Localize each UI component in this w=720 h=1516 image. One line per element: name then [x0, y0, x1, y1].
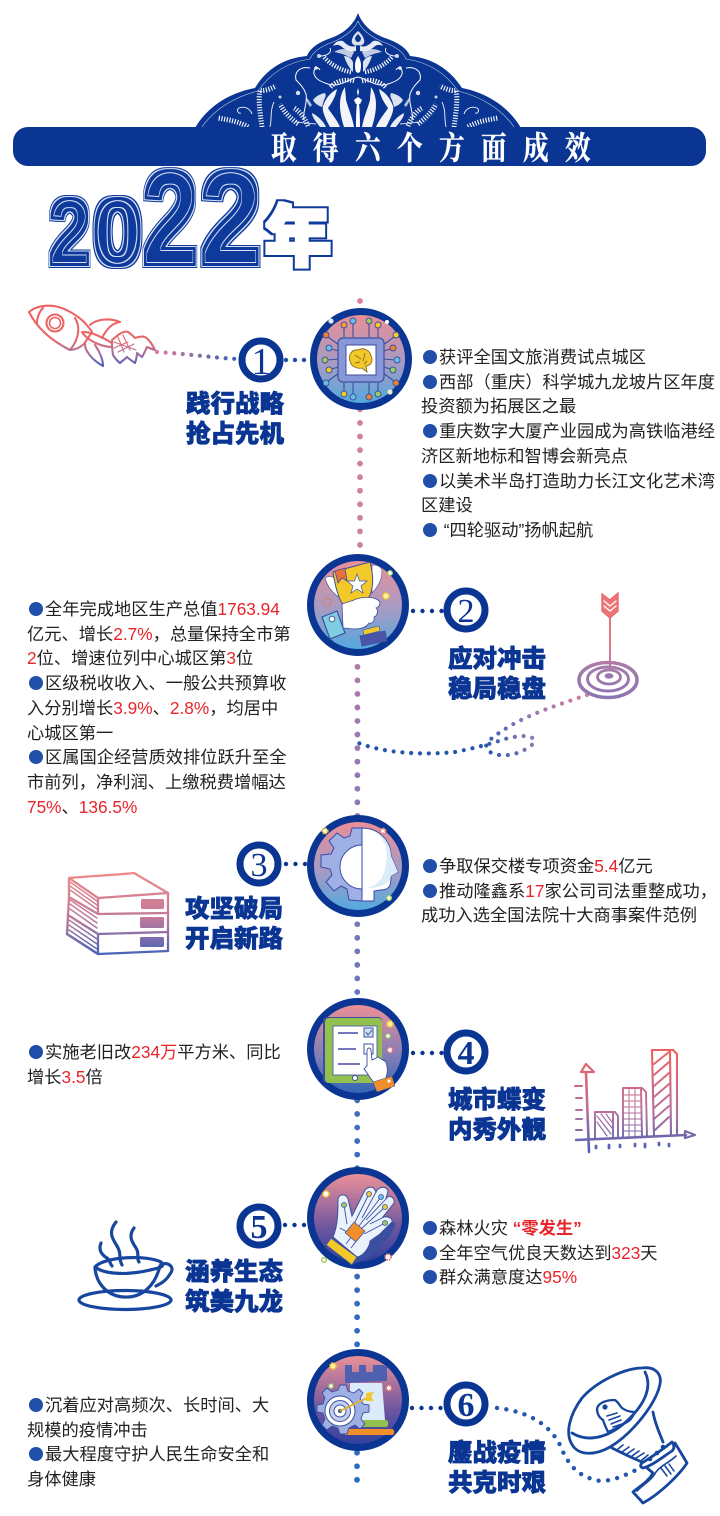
heading 1: 践行战略 — [186, 391, 284, 418]
heading 4: 内秀外靓 — [448, 1117, 546, 1144]
text block 2 — [27, 599, 291, 817]
title banner — [13, 127, 706, 166]
number badge 2: 2 — [458, 593, 474, 630]
text block 2: 心城区第一 — [27, 723, 113, 743]
icon: bar chart — [575, 1050, 695, 1152]
text block 6: 最大程度守护人民生命安全和 — [45, 1444, 269, 1464]
text block 6: 规模的疫情冲击 — [27, 1420, 148, 1440]
text block 6 — [27, 1395, 269, 1489]
text block 4: 增长3.5倍 — [27, 1067, 103, 1087]
circle icon 3: gear and head — [310, 818, 406, 914]
heading 6 — [448, 1439, 546, 1497]
text block 2: 区级税收收入、一般公共预算收 — [45, 673, 287, 693]
heading 4 — [448, 1086, 546, 1144]
heading 1: 抢占先机 — [186, 421, 284, 448]
text block 6: 沉着应对高频次、长时间、大 — [45, 1395, 269, 1415]
number badge 2 — [447, 591, 485, 630]
heading 3: 攻坚破局 — [185, 896, 283, 923]
text block 1: 获评全国文旅消费试点城区 — [439, 347, 646, 367]
year 2022: 0 — [93, 181, 142, 285]
heading 5: 筑美九龙 — [185, 1289, 283, 1316]
text block 1: “四轮驱动”扬帆起航 — [444, 520, 593, 540]
title text: 取得六个方面成效 — [271, 130, 607, 166]
icon: target with arrow — [579, 593, 637, 698]
year 2022 — [49, 143, 331, 293]
timeline dotted line — [357, 301, 360, 1481]
circle icon 1: chip — [314, 312, 408, 406]
text block 5 — [423, 1218, 658, 1287]
text block 1 — [421, 347, 715, 540]
heading 5: 涵养生态 — [185, 1259, 283, 1286]
text block 5: 森林火灾 “零发生” — [439, 1218, 582, 1238]
number badge 1: 1 — [252, 341, 270, 383]
text block 2: 75%、136.5% — [27, 797, 137, 817]
text block 2: 亿元、增长2.7%，总量保持全市第 — [27, 624, 291, 644]
ornamental dome — [195, 13, 521, 128]
number badge 6: 6 — [458, 1387, 474, 1424]
text block 1: 投资额为拓展区之最 — [421, 396, 576, 416]
year 2022: 2 — [49, 180, 90, 284]
text block 3: 成功入选全国法院十大商事案件范例 — [421, 905, 697, 925]
number badge 4 — [447, 1033, 485, 1072]
text block 1: 以美术半岛打造助力长江文化艺术湾 — [439, 471, 715, 491]
text block 1: 济区新地标和智博会新亮点 — [421, 446, 628, 466]
heading 2: 应对冲击 — [448, 646, 546, 673]
icon: tea cup — [79, 1222, 172, 1310]
text block 2: 市前列，净利润、上缴税费增幅达 — [27, 772, 286, 792]
text block 6: 身体健康 — [27, 1469, 96, 1489]
circle icon 4: tablet — [310, 1002, 406, 1096]
number badge 5 — [240, 1207, 278, 1246]
number badge 3 — [240, 845, 278, 884]
text block 1: 重庆数字大厦产业园成为高铁临港经 — [439, 421, 715, 441]
heading 4: 城市蝶变 — [448, 1087, 546, 1114]
text block 4: 实施老旧改234万平方米、同比 — [45, 1042, 281, 1062]
year 2022: 年 — [265, 200, 331, 274]
heading 3: 开启新路 — [185, 926, 283, 953]
heading 6: 鏖战疫情 — [448, 1440, 546, 1467]
connector: badge 6 to megaphone — [497, 1408, 636, 1481]
text block 3 — [421, 856, 717, 925]
connector: badge 1 to circle 1 — [286, 358, 308, 362]
text block 5: 群众满意度达95% — [439, 1267, 577, 1287]
icon: rocket — [29, 306, 155, 366]
number badge 3: 3 — [250, 847, 268, 884]
text block 2: 全年完成地区生产总值1763.94 — [45, 599, 280, 619]
text block 5: 全年空气优良天数达到323天 — [439, 1243, 658, 1263]
circle icon 2: trophy — [310, 558, 406, 652]
number badge 1 — [242, 341, 280, 383]
text block 3: 推动隆鑫系17家公司司法重整成功， — [439, 881, 717, 901]
connector: circle 2 to badge 2 — [413, 609, 442, 613]
number badge 4: 4 — [458, 1035, 474, 1072]
connector: looping line from target — [356, 695, 587, 755]
number badge 5: 5 — [250, 1209, 268, 1246]
circle icon 5: smart glove — [310, 1170, 406, 1266]
year 2022: 2 — [200, 143, 261, 292]
text block 1: 区建设 — [421, 495, 473, 515]
icon: megaphone — [569, 1368, 687, 1503]
text block 2: 区属国企经营质效排位跃升至全 — [45, 747, 287, 767]
text block 1: 西部（重庆）科学城九龙坡片区年度 — [439, 372, 715, 392]
text block 3: 争取保交楼专项资金5.4亿元 — [439, 856, 653, 876]
year 2022: 2 — [142, 145, 198, 293]
text block 2: 入分别增长3.9%、2.8%，均居中 — [27, 698, 278, 718]
heading 6: 共克时艰 — [448, 1470, 546, 1497]
connector: badge 5 to circle 5 — [285, 1223, 305, 1227]
heading 1 — [186, 390, 284, 448]
text block 2: 2位、增速位列中心城区第3位 — [27, 648, 253, 668]
heading 2: 稳局稳盘 — [448, 676, 546, 703]
heading 3 — [185, 895, 284, 953]
icon: stack of books — [67, 873, 168, 954]
connector: circle 4 to badge 4 — [413, 1051, 442, 1055]
number badge 6 — [447, 1385, 485, 1424]
connector: circle 6 to badge 6 — [412, 1406, 442, 1410]
connector: badge 3 to circle 3 — [286, 862, 306, 866]
connector: rocket to badge 1 — [157, 352, 238, 359]
text block 4 — [27, 1042, 281, 1087]
heading 2 — [448, 645, 546, 703]
circle icon 6: castle and target gear — [310, 1352, 406, 1448]
heading 5 — [184, 1258, 284, 1316]
